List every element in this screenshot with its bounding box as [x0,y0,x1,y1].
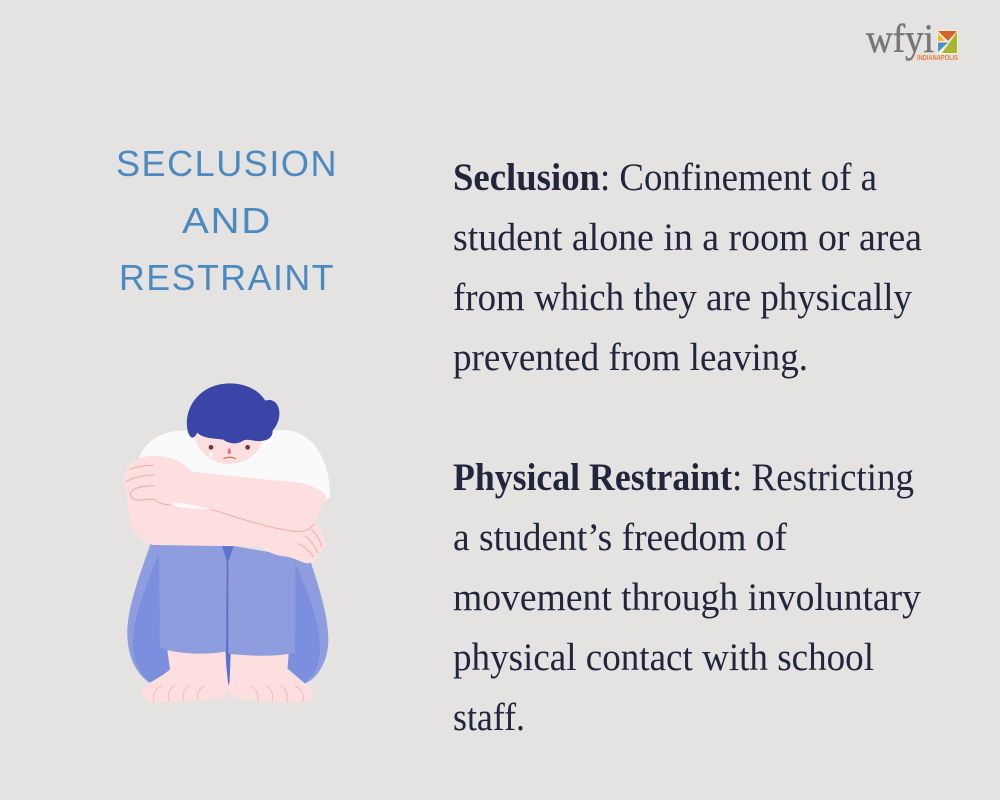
text block: physical restraint definition: movement through involuntary [453,576,921,619]
title: RESTRAINT [119,257,335,298]
text block: physical restraint definition: a student’s freedom of [453,516,787,559]
logo mark [937,30,958,54]
text block: seclusion definition [453,156,922,379]
text block: seclusion definition: Seclusion [453,156,600,199]
text block: seclusion definition: from which they are physically [453,276,912,319]
text block: physical restraint definition: physical contact with school [453,636,874,679]
trousers [127,543,328,687]
text block: seclusion definition: : Confinement of a [600,156,877,199]
feet [142,650,313,703]
logo location text: INDIANAPOLIS [917,53,958,62]
text block: physical restraint definition: Physical Restraint [453,456,732,499]
text block: seclusion definition: prevented from leaving. [453,336,808,379]
text block: seclusion definition: student alone in a room or area [453,216,922,259]
hair [187,383,279,443]
shirt [139,430,330,510]
text block: physical restraint definition: staff. [453,696,525,739]
logo wordmark: wfyi [866,16,934,61]
title: AND [182,200,272,241]
face [193,430,265,464]
illustration: distressed student hugging knees [124,383,330,703]
title: SECLUSION [116,143,338,184]
logo: WFYI Indianapolis [866,16,958,62]
title [116,143,338,298]
text block: physical restraint definition: : Restricting [732,456,914,499]
arms [124,456,327,563]
text block: physical restraint definition [453,456,921,739]
